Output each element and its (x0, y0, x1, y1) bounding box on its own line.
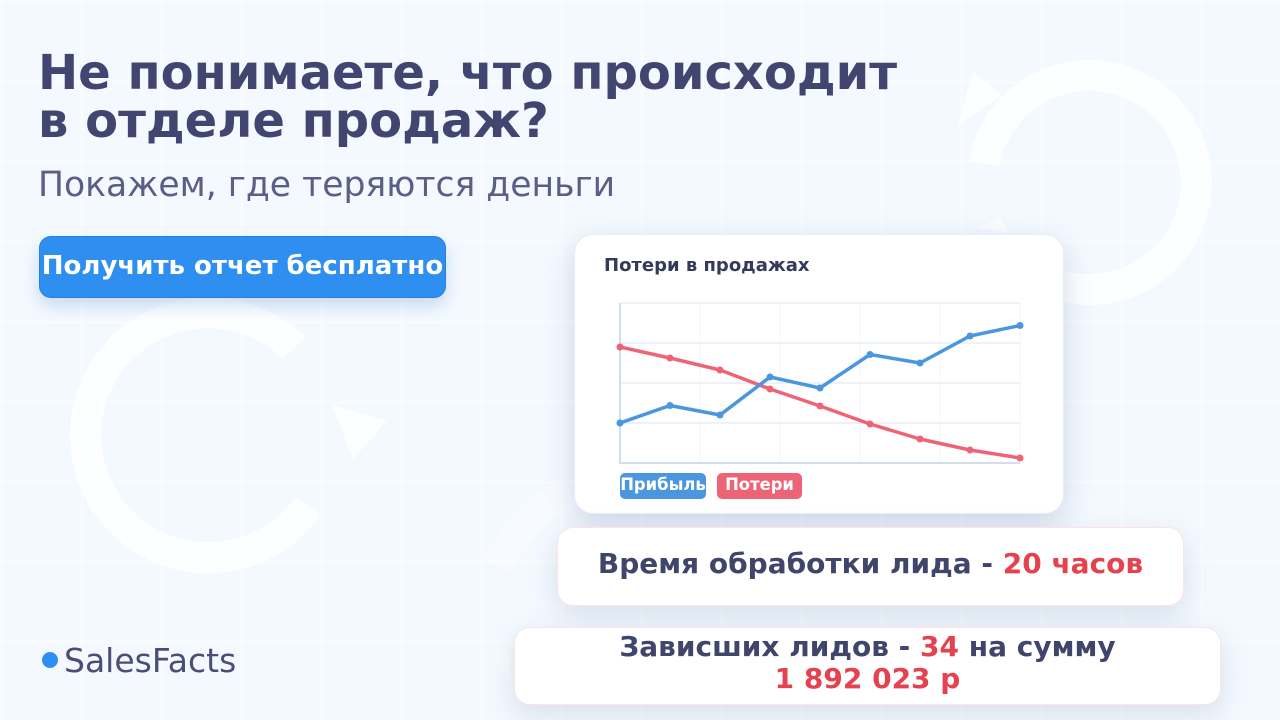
subtitle: Покажем, где теряются деньги (38, 165, 615, 205)
title (38, 45, 897, 149)
callout: stalled leads: 1 892 023 р (775, 662, 960, 695)
logo: SalesFacts (42, 641, 236, 680)
logo text: SalesFacts (64, 641, 236, 680)
legend: profit: Прибыль (620, 475, 706, 494)
button: get free report: Получить отчет бесплатно (42, 251, 443, 281)
icon: logo dot (42, 652, 58, 668)
callout: lead processing time: Время обработки лида - 20 часов (598, 547, 1143, 580)
line chart (616, 302, 1024, 464)
series: profit (616, 322, 1024, 426)
panel: sales losses chart (574, 234, 1064, 514)
callout: stalled leads (514, 627, 1221, 705)
legend: losses (717, 473, 802, 499)
callout: stalled leads: Зависших лидов - 34 на сумму (619, 630, 1116, 663)
title: в отделе продаж? (38, 93, 549, 149)
chart title: Потери в продажах (604, 255, 810, 276)
title: Не понимаете, что происходит (38, 45, 897, 101)
callout: lead processing time (557, 527, 1184, 606)
legend: losses: Потери (725, 475, 794, 494)
button: get free report (39, 236, 446, 298)
series: losses (616, 344, 1024, 462)
